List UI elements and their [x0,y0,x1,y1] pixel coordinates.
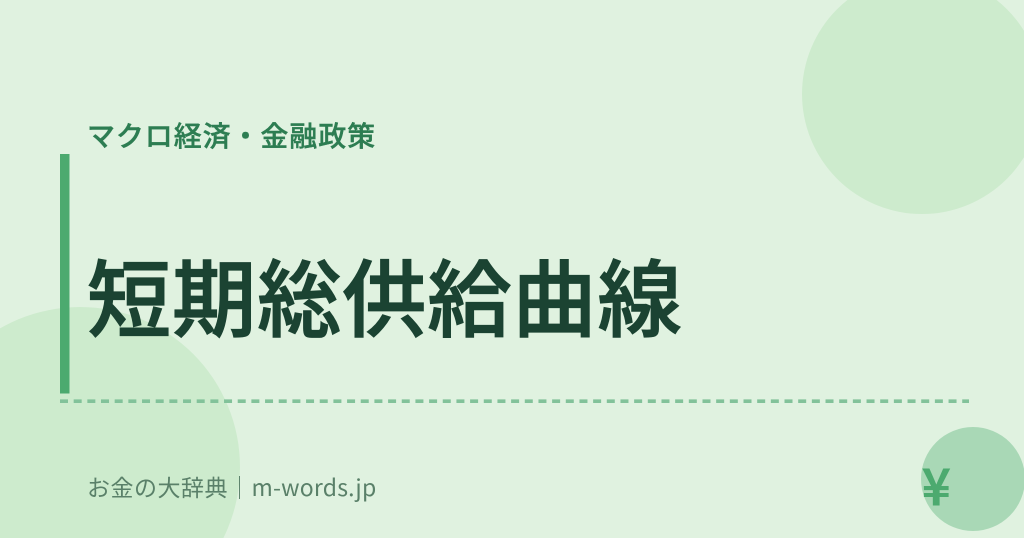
icon: yen sign: ¥ [922,448,950,520]
footer site name: お金の大辞典｜m-words.jp [87,469,376,503]
title: 短期総供給曲線 [87,234,683,355]
category label: マクロ経済・金融政策 [87,115,376,155]
